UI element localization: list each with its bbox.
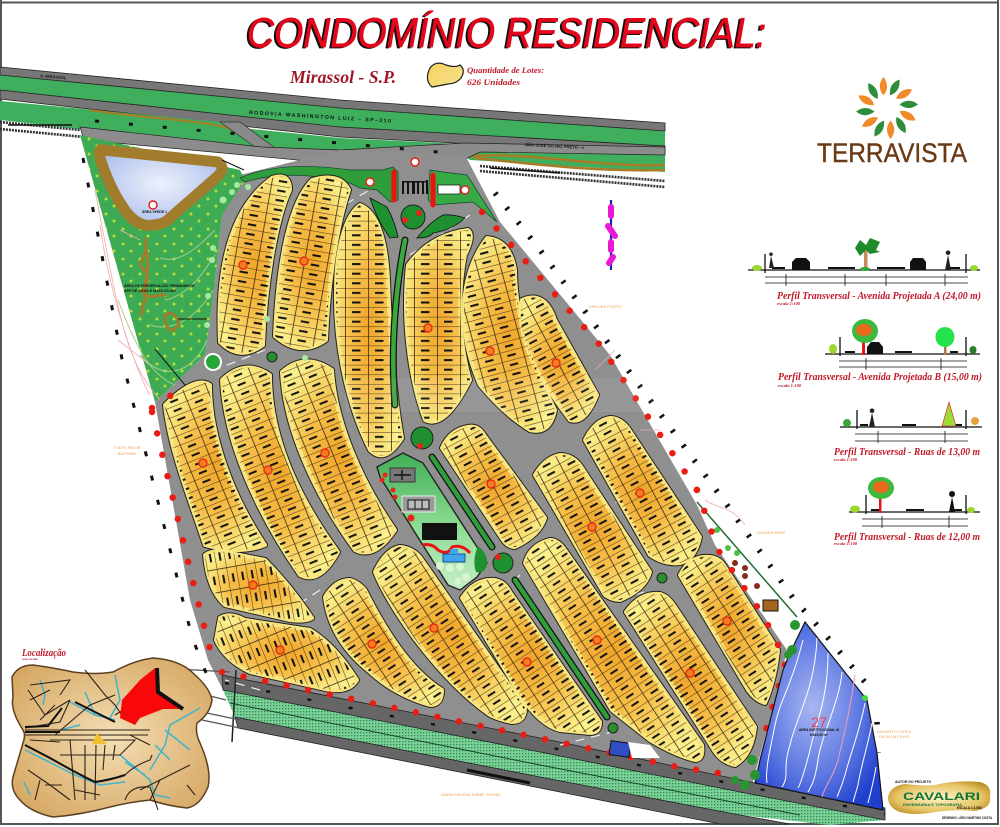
logo: Terravista [817, 77, 967, 168]
bushes [850, 506, 975, 513]
road profile A [748, 238, 981, 306]
avenue green medians [393, 240, 607, 717]
tagline: ENGENHARIA E TOPOGRAFIA [903, 802, 962, 807]
logo: Cavalari [888, 780, 993, 820]
project site [120, 668, 182, 725]
streams [24, 675, 200, 798]
institutional area 27 [731, 620, 883, 810]
small road label: A. MIRASSOL [40, 73, 67, 80]
icon: sun of leaves [856, 77, 918, 139]
green patch [474, 546, 487, 572]
owner east: GOLDEN PARK [757, 530, 786, 535]
left leaf garden [370, 198, 398, 238]
right leaf garden [417, 215, 465, 238]
road direction label: SÃO JOSÉ DO RIO PRETO --> [525, 142, 585, 150]
preservation label: ÁREA DE PRESERVAÇÃO PERMANENTE [124, 283, 195, 288]
map heading: Localização [21, 648, 66, 659]
entrance roundabout [401, 205, 425, 229]
road profile B [778, 319, 982, 388]
survey symbol: magenta marks [608, 200, 615, 270]
block number markers [199, 257, 731, 677]
road name: RODOVIA WASHINGTON LUIZ – SP–310 [249, 110, 391, 125]
people [769, 250, 951, 270]
red tree [868, 477, 894, 513]
caption: Perfil Transversal - Ruas de 12,00 m [834, 532, 980, 543]
owner southeast: GILBERTO LOPES [877, 729, 912, 734]
wordmark: CAVALARI [903, 791, 980, 803]
east wedge: golden park buffer [697, 502, 797, 650]
preservation label: APP DE ÁGUA E MATA CILIAR [124, 288, 176, 293]
cars [792, 258, 926, 270]
tree [855, 238, 880, 270]
road centre markings [215, 175, 650, 745]
subtitle: city: Mirassol - S.P. [289, 67, 396, 87]
gatehouse [402, 180, 428, 194]
car [867, 342, 883, 354]
roundabouts [205, 352, 667, 733]
clubhouse [390, 468, 415, 482]
neighbouring owners [114, 304, 912, 797]
plaza markers [366, 158, 469, 194]
road network base [155, 150, 787, 795]
tennis court [402, 496, 435, 512]
person [869, 408, 875, 427]
white building [438, 185, 460, 194]
bushes [752, 265, 978, 271]
green corner bushes [731, 620, 868, 790]
pond [99, 150, 222, 226]
owner west line 2: BUFFARE [118, 451, 137, 456]
road profile D [834, 477, 980, 546]
scale: ESCALA 1:1.000 [957, 806, 982, 810]
right green band [428, 170, 497, 222]
park: green preservation area [80, 135, 245, 402]
bushes [829, 344, 976, 354]
owner south: MARIA HELENA SABBE THOBIE [441, 792, 501, 797]
map land shape [12, 658, 212, 817]
utility block [609, 741, 660, 758]
map scale note: sem escala [21, 657, 38, 661]
caption: Perfil Transversal - Ruas de 13,00 m [834, 447, 980, 458]
lot blocks: residential lots [165, 176, 778, 765]
area caption: ÁREA INSTITUCIONAL III [799, 727, 839, 732]
contour lines: boundary [95, 190, 745, 525]
title: CONDOMÍNIO RESIDENCIAL: [247, 9, 766, 56]
bushes [843, 417, 979, 427]
legend: lots [427, 63, 544, 87]
pool [443, 549, 465, 562]
green tree [936, 327, 954, 355]
watermark [345, 378, 653, 412]
pale green bushes [204, 182, 308, 361]
left green band [240, 166, 398, 202]
highway: Rodovia Washington Luiz [0, 67, 665, 187]
trail [141, 238, 178, 330]
red tree [852, 319, 878, 355]
tree rows: perimeter [152, 212, 786, 775]
location map [12, 648, 212, 817]
drawing note: DESENHO: LÍRIO MARTINS COSTA [942, 815, 993, 820]
legend text: Quantidade de Lotes: [467, 66, 544, 75]
christmas tree [942, 402, 956, 426]
contour lines [767, 638, 876, 803]
caption: Perfil Transversal - Avenida Projetada B (15,00 m) [778, 372, 982, 383]
gold badge [888, 781, 990, 814]
icon: lot swatch [427, 63, 463, 87]
gate trees [394, 172, 433, 205]
legend text: 626 Unidades [467, 78, 520, 87]
area caption: 6.655,00 m² [810, 733, 829, 737]
person [949, 491, 955, 512]
area number: 27 [811, 714, 827, 730]
road profile C [834, 402, 982, 462]
caption: Perfil Transversal - Avenida Projetada A (24,00 m) [777, 291, 981, 302]
plaza and entrance [240, 158, 497, 238]
owner west: YVETE RAGIB [114, 445, 141, 450]
red tree line [423, 545, 470, 553]
pond label [142, 201, 167, 214]
roads [25, 670, 195, 810]
scale: escala 1:100 [834, 457, 858, 462]
author label: AUTOR DO PROJETO [895, 780, 932, 784]
bottom road and green strip [160, 668, 885, 825]
owner northeast: ORILDES PORTO [589, 304, 621, 309]
wordmark: TERRAVISTA [817, 138, 967, 168]
red shrubs [380, 472, 414, 522]
owner southeast line 2: DA SILVA FILHO [879, 734, 909, 739]
scale: escala 1:100 [834, 541, 858, 546]
recreation area [377, 453, 487, 590]
scale: escala 1:100 [777, 301, 801, 306]
pale bushes [436, 562, 470, 584]
scale: escala 1:100 [778, 383, 802, 388]
boundary ticks [83, 121, 878, 753]
city marker [92, 733, 107, 744]
sports court [422, 523, 457, 540]
pond label: ÁREA VERDE 1 [142, 209, 167, 214]
